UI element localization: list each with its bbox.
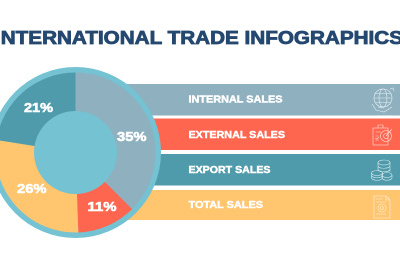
label: internal sales: INTERNAL SALES [188,94,283,106]
value: 21%: 21% [24,100,53,115]
title: INTERNATIONAL TRADE INFOGRAPHICS [0,28,400,48]
panel: total sales band [100,190,400,220]
panel: external sales band [100,118,400,150]
panel: export sales band [100,154,400,186]
value: 35%: 35% [117,129,147,144]
icon: coin stacks [372,160,392,180]
label: external sales: EXTERNAL SALES [188,130,285,141]
slice: 21% [0,72,75,152]
label: total sales: TOTAL SALES [188,200,263,211]
slice: 11% [76,152,132,232]
chart: donut [0,67,161,238]
slice: 26% [0,140,78,232]
panel: internal sales band [100,84,400,116]
value: 26%: 26% [17,181,47,196]
icon: globe in hand [372,88,394,112]
donut hole [34,111,117,194]
slice: 35% [76,72,156,209]
icon: document [374,196,390,218]
outer ring [0,67,161,238]
icon: clipboard with target [373,125,392,145]
value: 11%: 11% [88,199,117,214]
label: export sales: EXPORT SALES [188,165,271,176]
